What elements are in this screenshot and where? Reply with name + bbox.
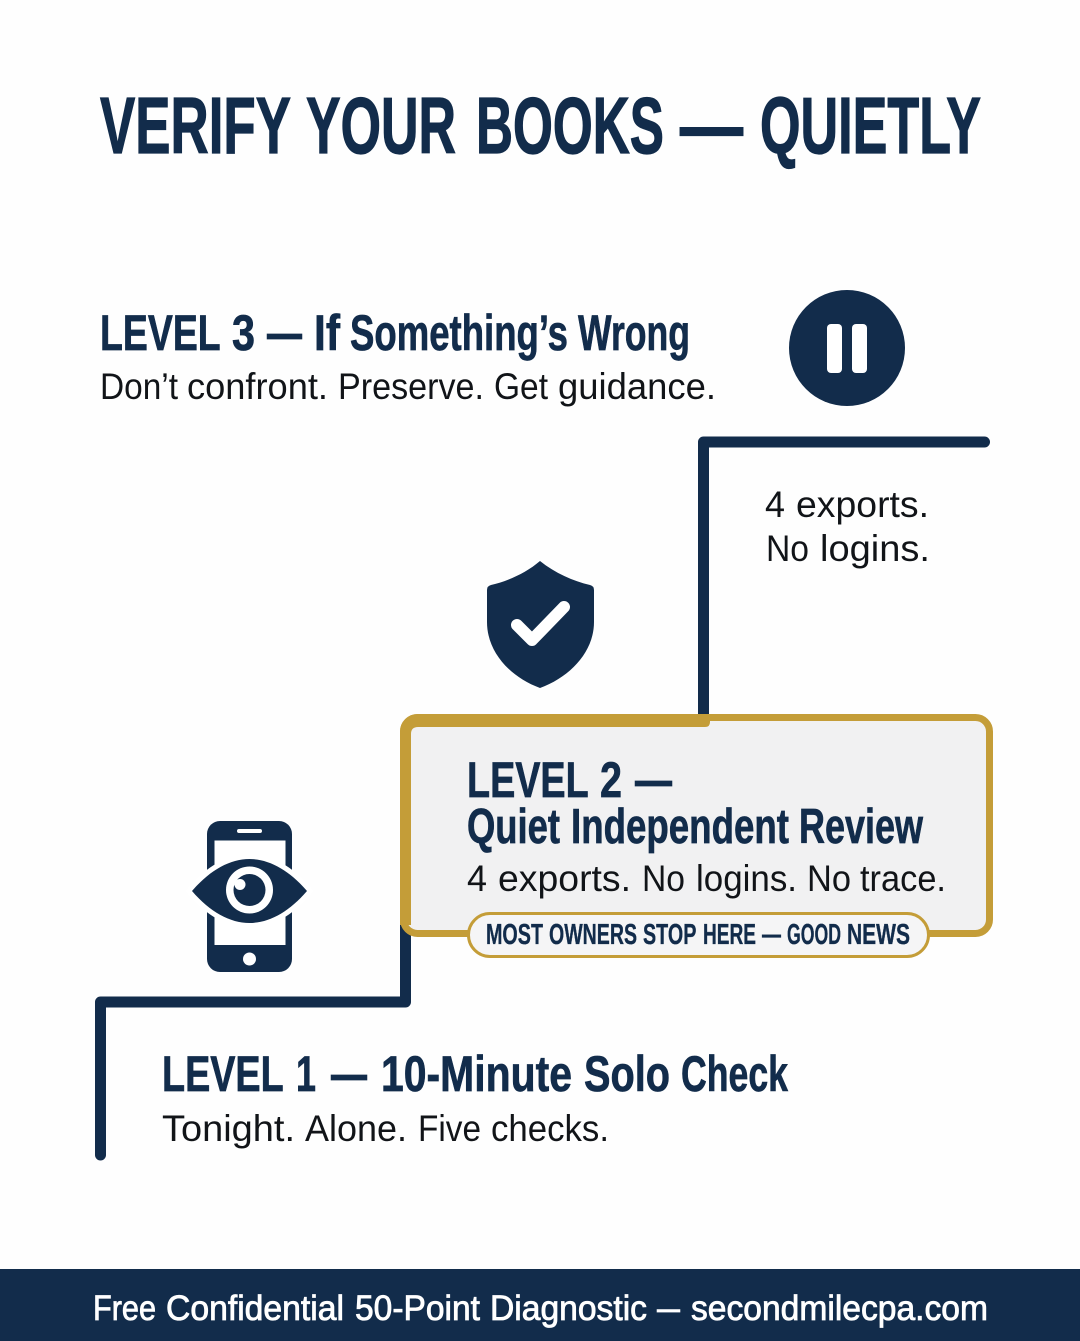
footer banner: Confidential: [166, 1289, 344, 1328]
level 2 description: logins.: [696, 858, 797, 899]
level 2 description: trace.: [860, 858, 946, 899]
level 2 description: No: [807, 858, 851, 899]
callout pill: GOOD: [787, 919, 841, 951]
step note: No: [766, 528, 809, 569]
callout pill: —: [762, 919, 781, 951]
callout pill: [468, 914, 928, 956]
level 3 heading: —: [267, 305, 302, 361]
footer banner: Diagnostic: [490, 1289, 647, 1328]
callout pill: STOP: [643, 919, 696, 951]
level 1 description: Alone.: [305, 1108, 407, 1149]
level 2 description: No: [642, 858, 685, 899]
level 3 description: Preserve.: [338, 366, 484, 407]
level 1 block: [162, 1046, 788, 1149]
title: —: [680, 81, 743, 170]
panel: level 2: [400, 714, 990, 956]
level 2 heading: —: [635, 752, 672, 808]
title: VERIFY: [100, 81, 291, 170]
level 3 heading: Something’s: [350, 305, 568, 361]
callout pill: MOST: [486, 919, 543, 951]
stair line: lower step: [100, 925, 406, 1155]
level 1 heading: Solo: [584, 1046, 670, 1102]
level 2 description: exports.: [498, 858, 631, 899]
step note: exports.: [796, 484, 929, 525]
callout pill: NEWS: [847, 919, 910, 951]
level 3 heading: LEVEL: [100, 305, 220, 361]
level 3 heading: If: [314, 305, 340, 361]
level 2 description: 4: [467, 858, 487, 899]
stair line: upper step: [704, 442, 984, 720]
level 3 description: confront.: [187, 366, 328, 407]
level 1 heading: Check: [681, 1046, 788, 1102]
level 3 block: [100, 305, 716, 407]
level 3 heading: Wrong: [578, 305, 690, 361]
step note: logins.: [820, 528, 930, 569]
step note: [765, 484, 930, 569]
level 3 description: Don’t: [100, 366, 179, 407]
panel: level 2: Quiet: [467, 800, 560, 854]
level 1 heading: —: [331, 1046, 367, 1102]
level 2 heading: 2: [600, 752, 622, 808]
level 1 heading: 1: [296, 1046, 316, 1102]
level 3 heading: 3: [232, 305, 255, 361]
panel: level 2: Review: [799, 800, 924, 854]
level 3 description: Get: [494, 366, 549, 407]
icon: phone with eye: [192, 821, 307, 972]
step note: 4: [765, 484, 785, 525]
level 1 description: Five: [418, 1108, 481, 1149]
callout pill: OWNERS: [549, 919, 637, 951]
level 1 heading: LEVEL: [162, 1046, 283, 1102]
title: BOOKS: [476, 81, 664, 170]
footer banner: [0, 1269, 1080, 1341]
level 3 description: guidance.: [558, 366, 716, 407]
icon: shield with check: [487, 561, 594, 688]
panel: level 2: Independent: [571, 800, 789, 854]
callout pill: HERE: [703, 919, 756, 951]
level 1 description: Tonight.: [162, 1108, 295, 1149]
title: YOUR: [306, 81, 456, 170]
footer banner: Free: [93, 1289, 156, 1328]
level 1 description: checks.: [491, 1108, 609, 1149]
footer banner: secondmilecpa.com: [691, 1289, 988, 1328]
level 1 heading: 10-Minute: [381, 1046, 572, 1102]
icon: pause: [789, 290, 905, 406]
footer banner: —: [657, 1289, 680, 1328]
level 2 heading: LEVEL: [467, 752, 588, 808]
footer banner: 50-Point: [355, 1289, 480, 1328]
